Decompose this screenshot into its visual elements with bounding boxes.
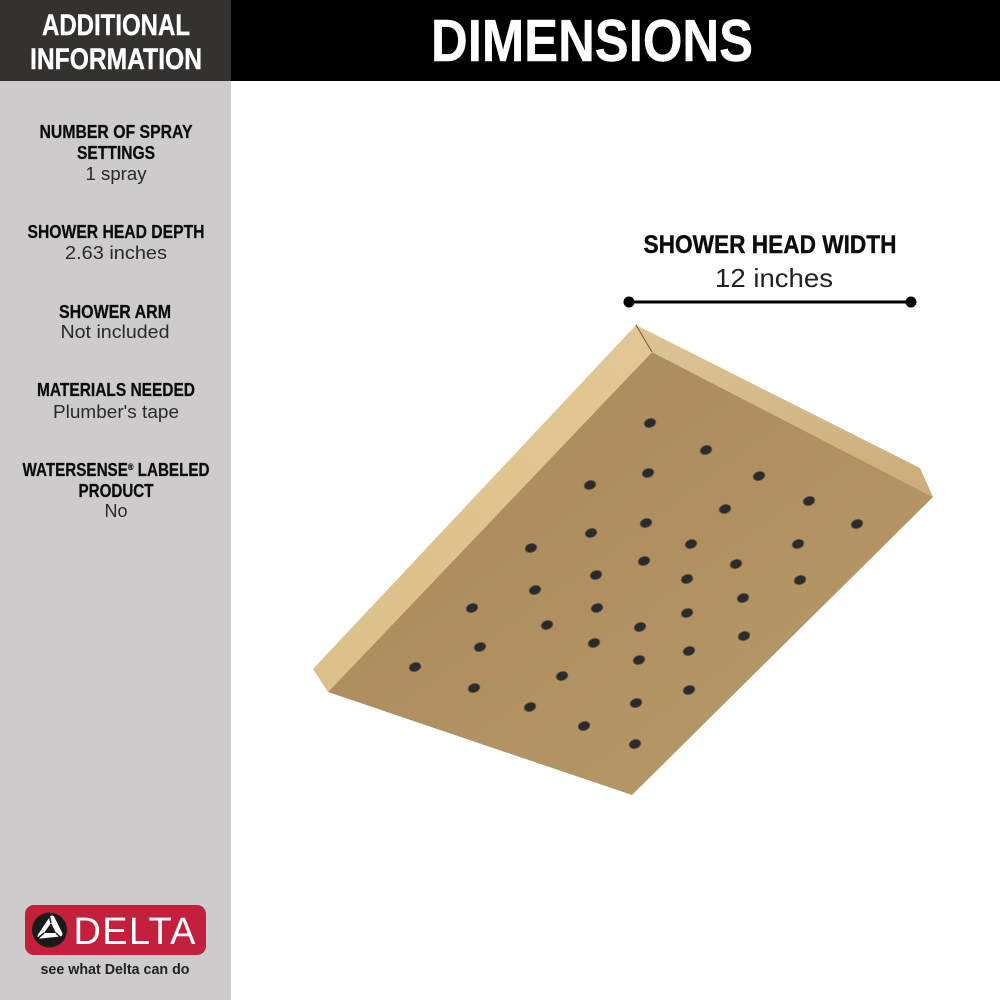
- info: watersense labeled product: LABELED: [133, 460, 210, 480]
- info: shower head depth: [28, 222, 204, 263]
- top bevel: [636, 325, 933, 497]
- info: number of spray settings: 1 spray: [86, 164, 146, 184]
- logo: delta: [25, 905, 206, 978]
- left bevel: [313, 325, 652, 692]
- info: shower head depth: 2.63 inches: [65, 243, 167, 263]
- title: dimensions: [231, 0, 1000, 81]
- info: watersense labeled product: PRODUCT: [78, 481, 154, 501]
- info: shower arm: [59, 302, 171, 342]
- info: number of spray settings: [40, 122, 192, 184]
- shower head width label: [644, 231, 896, 293]
- sidebar header: additional information: [0, 0, 231, 81]
- dimension line: [624, 296, 916, 308]
- info: watersense labeled product: ®: [128, 462, 134, 472]
- info: watersense labeled product: No: [104, 501, 128, 521]
- shower head: [313, 325, 933, 795]
- info: shower arm: SHOWER ARM: [59, 302, 171, 322]
- info: number of spray settings: NUMBER OF SPRAY: [40, 122, 192, 142]
- logo: delta: see what Delta can do: [40, 961, 190, 978]
- info: materials needed: Plumber's tape: [53, 402, 179, 422]
- shower head face: [328, 352, 933, 795]
- info: watersense labeled product: WATERSENSE: [22, 460, 147, 480]
- title: dimensions: DIMENSIONS: [431, 8, 753, 74]
- shower head width label: 12 inches: [715, 263, 833, 293]
- info: shower head depth: SHOWER HEAD DEPTH: [28, 222, 204, 242]
- info: materials needed: MATERIALS NEEDED: [37, 380, 195, 400]
- logo: delta: DELTA: [74, 911, 196, 953]
- sidebar header: additional information: INFORMATION: [30, 43, 202, 76]
- apex seam: [636, 325, 652, 352]
- spray nozzles: [408, 417, 864, 750]
- info: materials needed: [37, 380, 195, 422]
- sidebar panel: [0, 81, 231, 1000]
- info: watersense labeled product: [22, 460, 210, 521]
- shower head width label: SHOWER HEAD WIDTH: [644, 231, 896, 259]
- info: shower arm: Not included: [60, 322, 170, 342]
- info: number of spray settings: SETTINGS: [77, 143, 155, 163]
- sidebar header: additional information: ADDITIONAL: [42, 9, 190, 42]
